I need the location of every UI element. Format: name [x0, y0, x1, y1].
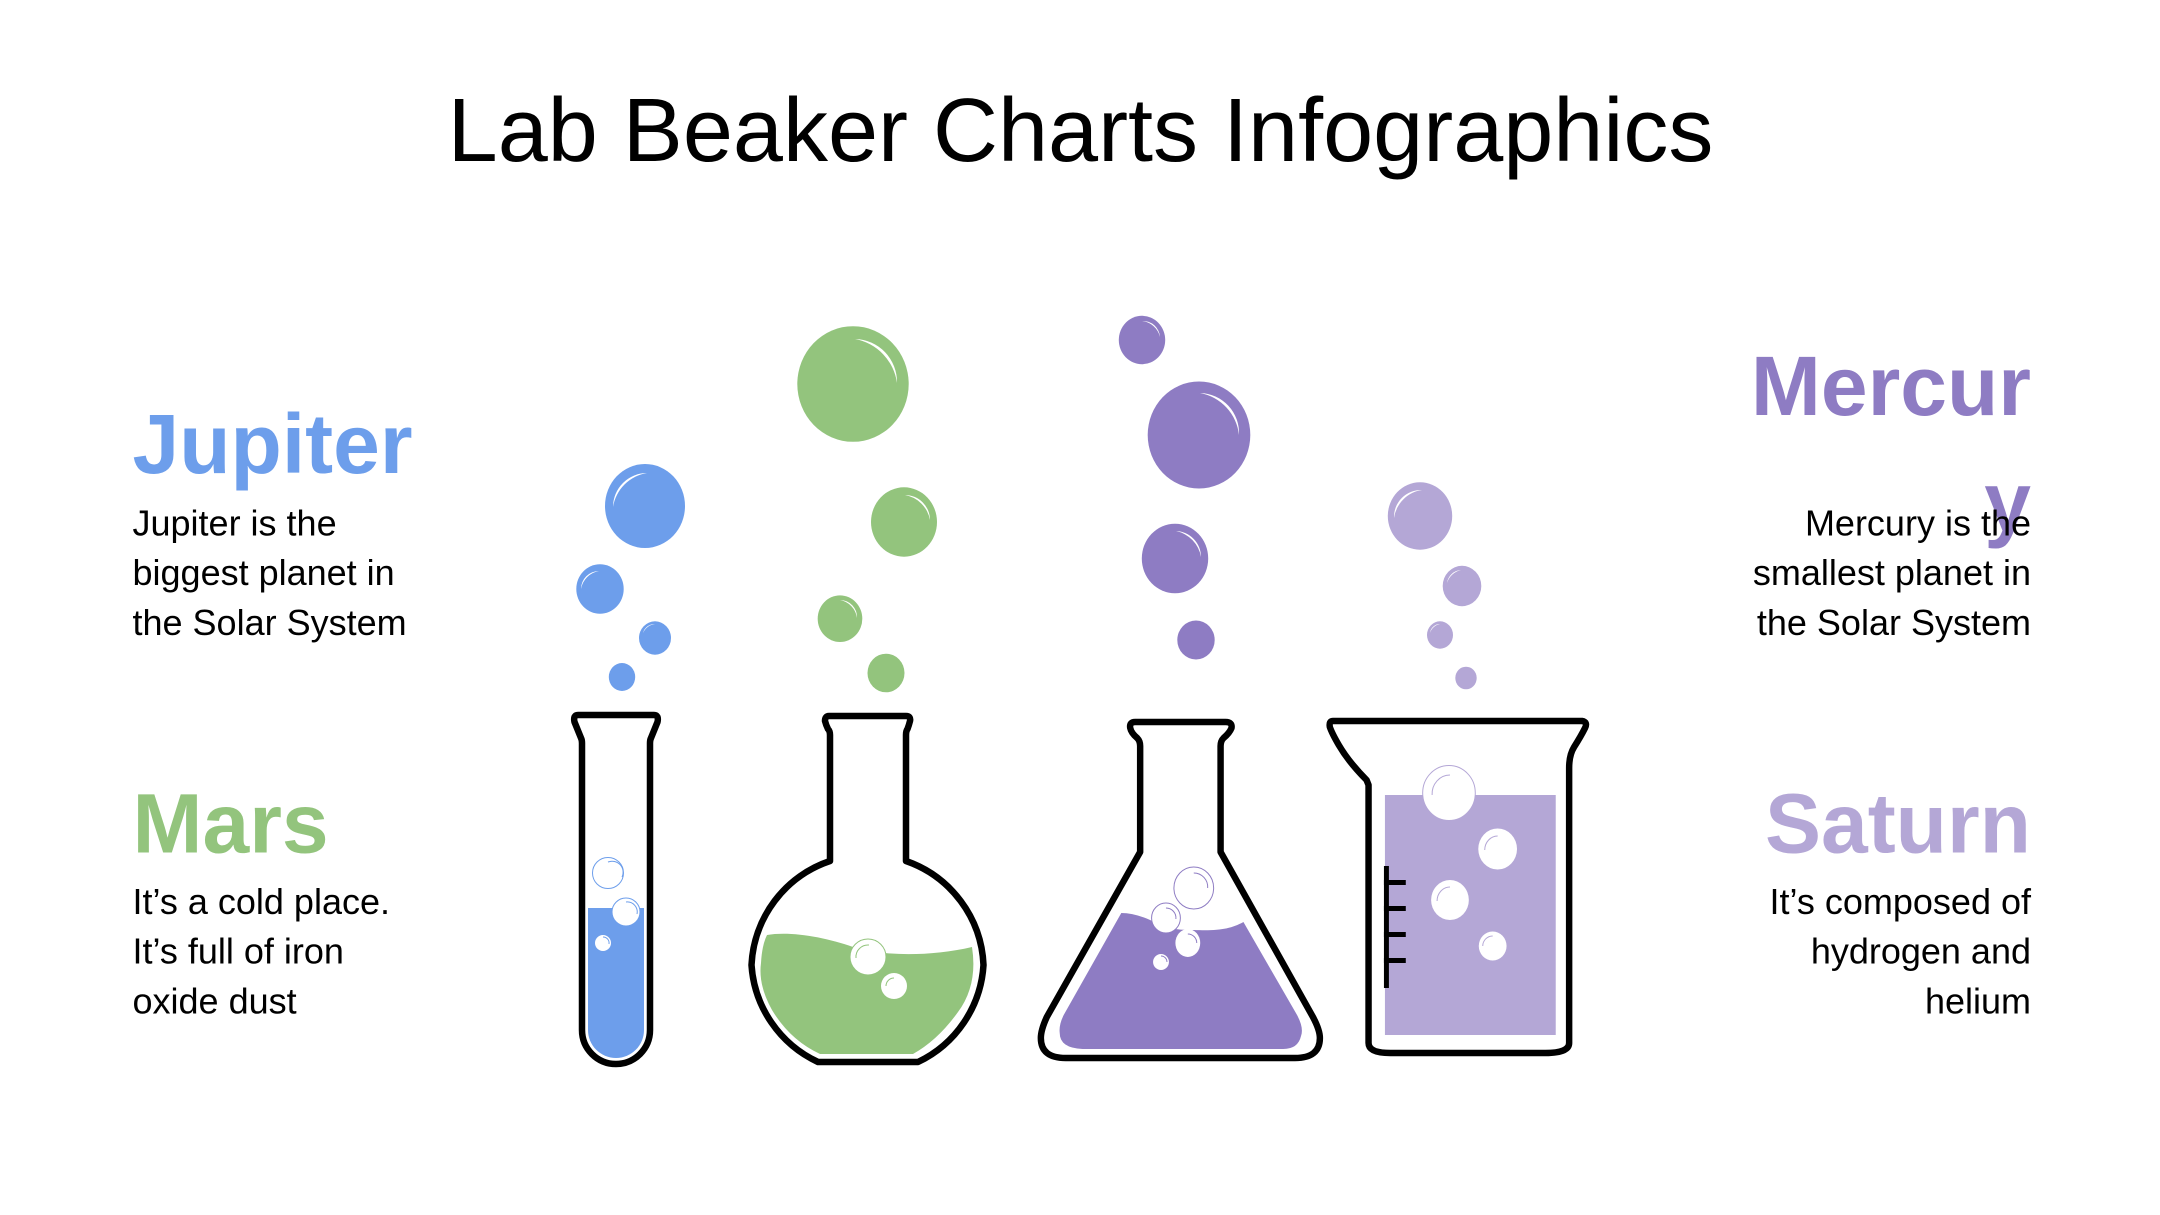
inner bubbles [1152, 867, 1214, 970]
round flask: green [752, 716, 984, 1062]
inner bubbles [592, 858, 640, 951]
panel: Mercury text [1751, 339, 2031, 643]
description: Jupiter: the Solar System [132, 602, 407, 643]
liquid [1060, 913, 1302, 1049]
rising bubbles: blue [576, 464, 685, 691]
rising bubbles: green [797, 326, 937, 692]
liquid [1385, 795, 1556, 1035]
description: Saturn: hydrogen and [1811, 931, 2031, 972]
heading: Mercury: y [1984, 455, 2031, 549]
panel: Jupiter text [132, 397, 413, 643]
inner bubbles [850, 939, 907, 999]
liquid [588, 908, 644, 1058]
description: Mars: oxide dust [132, 980, 297, 1021]
description: Saturn: helium [1925, 980, 2031, 1021]
test tube: blue [574, 715, 658, 1064]
rising bubbles: lavender [1388, 482, 1481, 689]
description: Mercury: Mercury is the [1805, 502, 2031, 544]
rising bubbles: purple [1119, 316, 1250, 660]
erlenmeyer flask: purple [1041, 722, 1320, 1058]
description: Saturn: It’s composed of [1770, 881, 2032, 922]
liquid [760, 934, 973, 1054]
description: Jupiter: biggest planet in [132, 552, 395, 593]
panel: Saturn text [1765, 776, 2032, 1021]
glass outline [1330, 721, 1586, 1053]
glass outline [752, 716, 984, 1062]
panel: Mars text [132, 776, 390, 1021]
glass outline [1041, 722, 1320, 1058]
heading: Mars: Mars [132, 776, 329, 870]
description: Mercury: the Solar System [1757, 602, 2031, 643]
heading: Mercury: Mercur [1751, 339, 2031, 433]
title: Lab Beaker Charts Infographics [448, 81, 1713, 181]
measurement ticks [1384, 866, 1406, 988]
description: Mars: It’s a cold place. [132, 881, 390, 922]
description: Mercury: smallest planet in [1753, 552, 2031, 593]
description: Mars: It’s full of iron [132, 931, 344, 972]
description: Jupiter: Jupiter is the [132, 502, 337, 544]
graduated beaker: lavender [1330, 721, 1586, 1053]
heading: Saturn: Saturn [1765, 776, 2031, 870]
heading: Jupiter: Jupiter [132, 397, 413, 491]
glass outline [574, 715, 658, 1064]
inner bubbles [1423, 766, 1517, 960]
